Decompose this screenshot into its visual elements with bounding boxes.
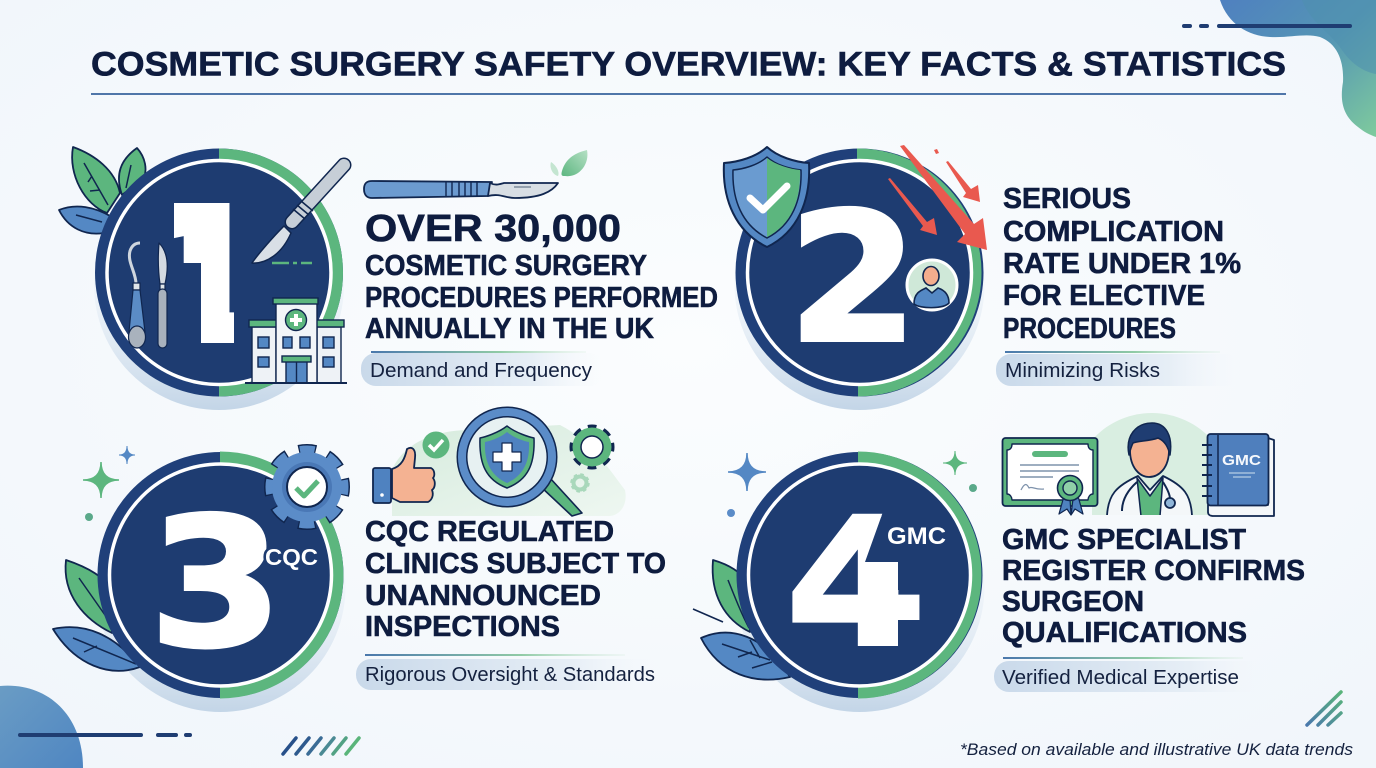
statistic heading: RATE UNDER 1% xyxy=(1003,248,1241,280)
badge shadow xyxy=(734,462,984,712)
icon: GMC register book: GMC xyxy=(1222,452,1261,469)
icon: green backdrop xyxy=(392,425,626,516)
statistic heading xyxy=(365,516,666,643)
statistic heading: UNANNOUNCED xyxy=(365,580,601,612)
badge: number 2 xyxy=(734,148,984,410)
green incision dashes xyxy=(272,262,312,264)
badge shadow xyxy=(96,462,346,712)
badge: number 4: 4 xyxy=(786,481,926,686)
decorative dashes: top right xyxy=(1184,24,1350,28)
icon: thumbs up xyxy=(373,448,435,503)
badge: number 3: CQC xyxy=(265,544,318,570)
badge: number 4 xyxy=(736,452,982,698)
icon: sparkles xyxy=(83,446,135,521)
statistic heading: REGISTER CONFIRMS xyxy=(1002,555,1305,587)
icon: leaves xyxy=(59,147,146,234)
icon: dental tools xyxy=(128,243,167,348)
icon: hospital xyxy=(245,298,347,383)
statistic heading: QUALIFICATIONS xyxy=(1002,617,1247,649)
statistic heading: COMPLICATION xyxy=(1003,216,1224,248)
label pill: Verified Medical Expertise xyxy=(1002,667,1239,689)
icon: patient avatar xyxy=(907,260,957,310)
statistic heading: PROCEDURES PERFORMED xyxy=(365,282,718,314)
decorative blob: top right xyxy=(1220,0,1376,137)
badge: number 3 xyxy=(98,452,344,698)
badge: number 3: 3 xyxy=(149,480,283,687)
label pill xyxy=(356,654,662,690)
icon: green backdrop xyxy=(1092,413,1212,515)
badge: number 2: 2 xyxy=(788,176,918,383)
icon: certificate xyxy=(1002,438,1098,515)
statistic heading: INSPECTIONS xyxy=(365,611,560,643)
decorative lines: bottom left xyxy=(20,735,359,754)
panel 2: complication rate xyxy=(724,145,1242,410)
icon: small scalpel xyxy=(364,181,558,198)
title: COSMETIC SURGERY SAFETY OVERVIEW: KEY FACTS & STATISTICS xyxy=(91,46,1286,84)
footnote: *Based on available and illustrative UK data trends xyxy=(960,741,1353,759)
statistic heading: CQC REGULATED xyxy=(365,516,614,548)
statistic heading: ANNUALLY IN THE UK xyxy=(365,313,654,345)
decorative slashes: bottom right xyxy=(1307,692,1341,725)
badge: number 1 xyxy=(94,148,344,410)
icon: leaves xyxy=(53,560,140,671)
icon: doctor xyxy=(1107,423,1192,516)
statistic heading: SURGEON xyxy=(1002,586,1144,618)
statistic heading: SERIOUS xyxy=(1003,183,1131,215)
statistic heading: CLINICS SUBJECT TO xyxy=(365,548,666,580)
icon: downward red arrows xyxy=(888,145,987,250)
icon: large scalpel xyxy=(252,165,344,263)
statistic heading xyxy=(1002,524,1305,649)
statistic heading xyxy=(1003,183,1241,345)
label pill xyxy=(996,351,1242,386)
statistic heading xyxy=(365,208,718,345)
icon: small floating leaves xyxy=(550,150,587,176)
icon: sparkles xyxy=(727,451,977,517)
panel 3: CQC inspections xyxy=(53,412,666,712)
icon: gear with check xyxy=(270,450,344,524)
panel 1: procedures xyxy=(59,147,718,410)
label pill: Rigorous Oversight & Standards xyxy=(365,664,655,686)
icon: green gears xyxy=(572,428,611,492)
icon: check bubble xyxy=(422,432,450,458)
statistic heading: GMC SPECIALIST xyxy=(1002,524,1246,556)
label pill xyxy=(361,351,605,386)
icon: leaves xyxy=(693,560,790,680)
decorative blob: bottom left xyxy=(0,686,83,768)
icon: shield with check xyxy=(724,147,809,247)
statistic heading: COSMETIC SURGERY xyxy=(365,250,647,282)
label pill: Minimizing Risks xyxy=(1005,360,1160,382)
panel 4: GMC register xyxy=(693,413,1305,712)
statistic heading: PROCEDURES xyxy=(1003,313,1176,345)
icon: GMC register book xyxy=(1202,434,1274,516)
icon: magnifier with shield xyxy=(462,412,582,516)
statistic heading: FOR ELECTIVE xyxy=(1003,280,1205,312)
label pill: Demand and Frequency xyxy=(370,360,592,382)
label pill xyxy=(994,657,1272,692)
badge: number 4: GMC xyxy=(887,523,946,550)
badge: number 1: 1 xyxy=(136,167,268,388)
statistic heading: OVER 30,000 xyxy=(365,208,621,250)
title underline xyxy=(91,93,1286,95)
